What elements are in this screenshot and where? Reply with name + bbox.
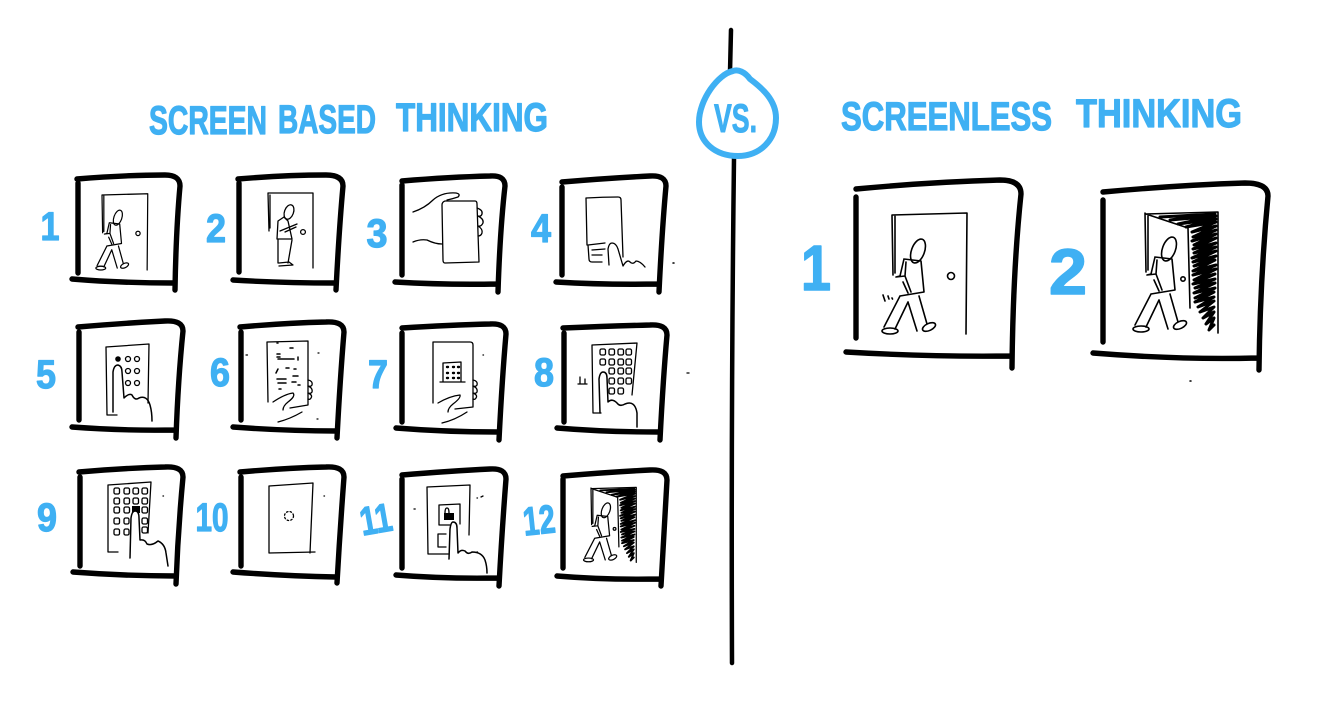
frame 11 (396, 469, 506, 586)
standing figure with phone (268, 193, 313, 268)
number 11: 11 (356, 496, 396, 544)
frame 6 (233, 322, 344, 438)
number 2 large: 2 (1049, 236, 1087, 308)
number 7: 7 (368, 353, 388, 397)
stray dot (673, 262, 674, 264)
number 2: 2 (206, 207, 226, 251)
frame 12 (557, 470, 667, 586)
heading: screen based thinking: BASED (278, 98, 376, 142)
heading: screenless thinking: SCREENLESS (841, 95, 1052, 139)
number 8: 8 (534, 351, 554, 395)
VS badge: VS. (714, 97, 757, 141)
number 12: 12 (521, 497, 557, 545)
walking figure at door (882, 213, 967, 334)
number 4: 4 (531, 207, 552, 251)
phone in hand (413, 193, 483, 263)
panel: screen based step 9 (37, 467, 183, 584)
frame 3 (395, 176, 505, 292)
keypad touch (106, 344, 152, 421)
stray dot (1190, 380, 1191, 382)
panel: screen based step 4 (531, 176, 666, 292)
number 6: 6 (210, 351, 230, 395)
unlock screen (414, 485, 487, 573)
panel: screen based step 3 (366, 176, 505, 292)
panel: screen based step 12 (521, 470, 667, 586)
panel: screen based step 5 (36, 321, 183, 438)
divider line (730, 30, 734, 663)
open door with figure (584, 487, 636, 562)
panel: screen based step 7 (368, 324, 506, 440)
door opened automatically (1133, 212, 1218, 333)
frame 5 (72, 321, 183, 438)
heading: screenless thinking (841, 92, 1242, 139)
number 3: 3 (366, 212, 388, 256)
frame 10 (233, 467, 344, 583)
number 1: 1 (40, 205, 60, 249)
keypad last digit (108, 482, 168, 566)
heading: screen based thinking (149, 96, 548, 143)
panel: screenless step 2 (1049, 183, 1268, 370)
phone swipe up (586, 197, 645, 267)
panel: screen based step 8 (534, 325, 689, 440)
frame 4 (556, 176, 666, 292)
frame 8 (557, 325, 667, 440)
frame 7 (396, 324, 506, 440)
heading: screenless thinking: THINKING (1076, 92, 1242, 136)
panel: screen based step 10 (196, 467, 344, 583)
phone with keypad (433, 342, 484, 423)
panel: screen based step 11 (356, 469, 506, 586)
frame 2 (233, 175, 343, 290)
number 1 large: 1 (801, 232, 831, 304)
keypad with typing (578, 343, 689, 427)
frame 9 (73, 467, 183, 584)
number 9: 9 (37, 496, 57, 540)
heading: screen based thinking: SCREEN (149, 99, 267, 143)
frame 1 (72, 175, 180, 290)
panel: screen based step 1 (40, 175, 180, 290)
heading: screen based thinking: THINKING (396, 96, 548, 140)
phone with settings text (246, 341, 319, 422)
panel: screen based step 2 (206, 175, 343, 290)
panel: screenless step 1 (801, 180, 1021, 368)
frame large 2 (1093, 183, 1268, 370)
VS badge (699, 70, 776, 156)
number 5: 5 (36, 353, 56, 397)
walking figure at door (96, 194, 148, 270)
frame large 1 (846, 180, 1021, 368)
number 10: 10 (196, 496, 228, 540)
phone loading spinner (269, 483, 324, 553)
panel: screen based step 6 (210, 322, 344, 438)
